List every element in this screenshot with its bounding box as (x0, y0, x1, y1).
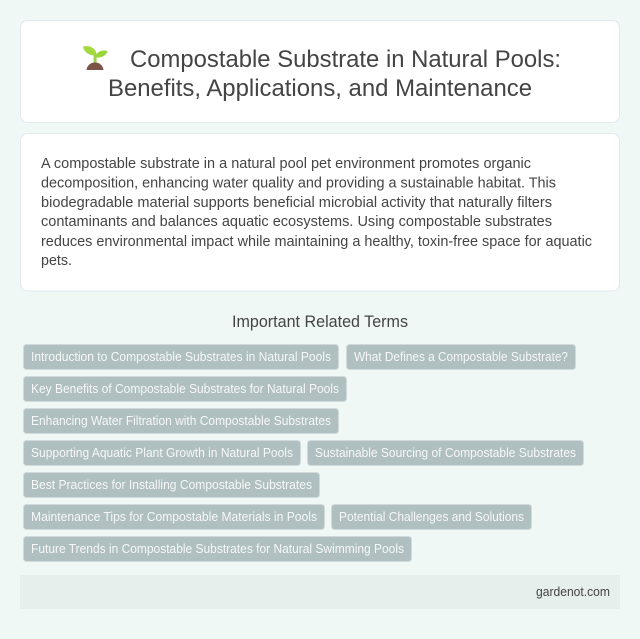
chip: water filtration (24, 408, 338, 434)
chip: future trends (24, 536, 412, 562)
footer site name: gardenot.com (536, 585, 610, 599)
chip: maintenance (24, 504, 324, 530)
heading: related terms: Important Related Terms (232, 313, 408, 331)
chip: key benefits: Key Benefits of Compostable Substrates for Natural Pools (31, 381, 339, 396)
description line 2: decomposition, enhancing water quality and providing a sustainable habitat. This (41, 174, 556, 192)
chip: best practices (24, 472, 320, 498)
description line 6: pets. (41, 252, 72, 269)
description line 3: biodegradable material supports beneficial microbial activity that naturally filters (41, 194, 552, 211)
chip: plant growth: Supporting Aquatic Plant Growth in Natural Pools (31, 445, 293, 460)
icon: seedling (83, 46, 108, 70)
panel: title card (20, 20, 620, 122)
chip: water filtration: Enhancing Water Filtration with Compostable Substrates (31, 413, 331, 428)
chip: challenges (332, 504, 532, 530)
description line 4: contaminants and balances aquatic ecosystems. Using compostable substrates (41, 213, 552, 230)
chip: maintenance: Maintenance Tips for Compostable Materials in Pools (31, 509, 317, 524)
chip: sourcing: Sustainable Sourcing of Compostable Substrates (315, 445, 576, 460)
chip: plant growth (24, 440, 300, 466)
term chips (24, 344, 584, 562)
chip: introduction: Introduction to Compostable Substrates in Natural Pools (31, 349, 331, 364)
chip: definition (346, 344, 576, 370)
chip: challenges: Potential Challenges and Solutions (339, 509, 524, 524)
chip: key benefits (24, 376, 346, 402)
title line 2: Benefits, Applications, and Maintenance (108, 75, 532, 102)
title line 1: Compostable Substrate in Natural Pools: (130, 46, 561, 73)
chip: definition: What Defines a Compostable Substrate? (354, 349, 568, 364)
chip: future trends: Future Trends in Compostable Substrates for Natural Swimming Pools (31, 541, 404, 556)
panel: description card (20, 134, 620, 291)
chip: best practices: Best Practices for Installing Compostable Substrates (31, 477, 312, 492)
chip: sourcing (308, 440, 584, 466)
description line 5: reduces environmental impact while maintaining a healthy, toxin-free space for aquatic (41, 233, 592, 250)
footer bar (20, 575, 620, 609)
description line 1: A compostable substrate in a natural pool pet environment promotes organic (41, 155, 531, 172)
chip: introduction (24, 344, 338, 370)
